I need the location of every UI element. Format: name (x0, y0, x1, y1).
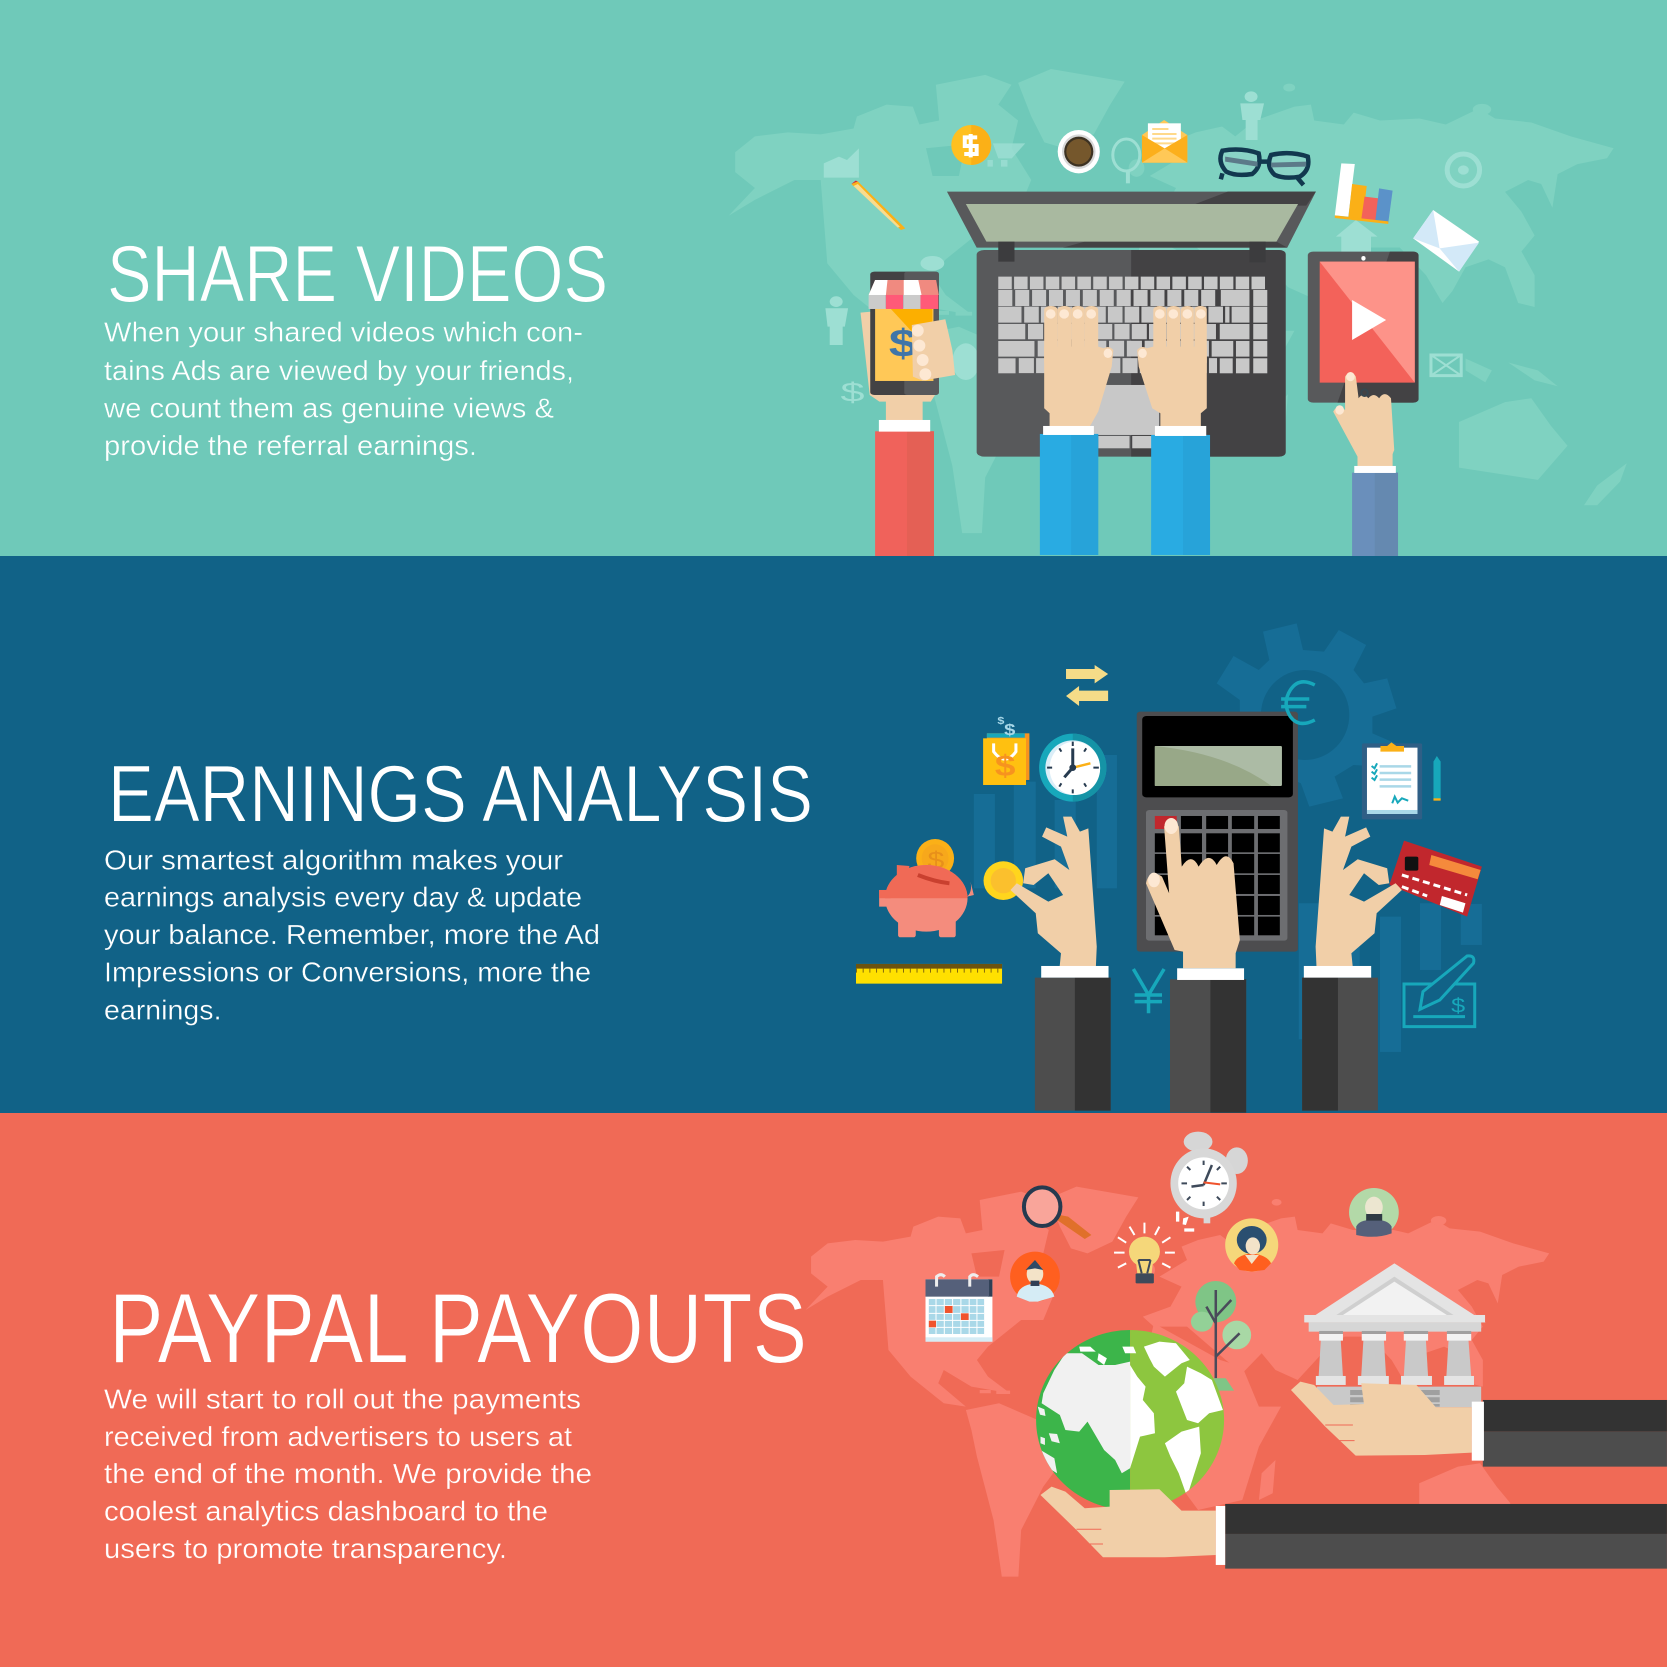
icon: bar chart (1335, 163, 1393, 224)
hand holding bank with sleeve (1291, 1382, 1667, 1467)
heading: share videos: SHARE VIDEOS (107, 230, 608, 320)
text: paypal payouts description: coolest analytics dashboard to the (104, 1496, 548, 1527)
text: earnings analysis description: Our smartest algorithm makes your (104, 844, 563, 875)
icon: bank building (1304, 1263, 1486, 1407)
icon: magnifying glass (1024, 1187, 1091, 1239)
calculator (1137, 712, 1298, 952)
icon: teal pencil (1433, 756, 1441, 801)
icon: shopping bag: $ (995, 751, 1016, 783)
text: earnings analysis description: earnings. (104, 994, 222, 1025)
icon: shopping bag: $ (1004, 721, 1015, 739)
heading: paypal payouts: PAYPAL PAYOUTS (109, 1273, 807, 1384)
panel: share videos (0, 0, 1667, 557)
icon: avatar bearded man green (1349, 1188, 1399, 1237)
icon: piggy bank (879, 839, 974, 937)
left hand with sleeve (1010, 817, 1111, 1111)
text: paypal payouts description: the end of the month. We provide the (104, 1458, 592, 1489)
text: earnings analysis description: your balance. Remember, more the Ad (104, 919, 600, 950)
icon: avatar man orange (1010, 1252, 1060, 1302)
text: earnings analysis description: Impressions or Conversions, more the (104, 957, 591, 988)
text: paypal payouts description: We will start to roll out the payments (104, 1383, 581, 1414)
panel: earnings analysis (0, 556, 1667, 1113)
right typing arm (1137, 306, 1210, 555)
icon: dollar coin (951, 125, 991, 165)
text: share videos description: When your shared videos which con- (104, 317, 583, 348)
icon: calendar (926, 1275, 992, 1342)
faint background icons (824, 91, 1377, 408)
icon: coffee cup (1058, 130, 1100, 173)
icon: earth globe (1036, 1330, 1224, 1510)
icon: gold coin (984, 861, 1023, 900)
pointing hand with blue sleeve (1333, 372, 1398, 557)
text: paypal payouts description: users to promote transparency. (104, 1533, 507, 1564)
keyboard (998, 283, 1267, 366)
world map background (806, 1187, 1560, 1577)
phone in hand with red sleeve (861, 272, 955, 557)
panel: paypal payouts (0, 1113, 1667, 1667)
illustration: laptop, phone and tablet (824, 91, 1480, 557)
icon: wall clock (1039, 734, 1106, 802)
left typing arm (1040, 306, 1113, 555)
icon: euro (1281, 682, 1315, 723)
icon: cheque and pen (1404, 956, 1475, 1027)
tablet with play button (1308, 252, 1419, 403)
faint gear and bars (974, 623, 1482, 1052)
icon: yen (1133, 969, 1164, 1013)
hand holding globe with sleeve (1041, 1487, 1667, 1569)
text: share videos description (103, 317, 583, 461)
text: earnings analysis description (104, 844, 600, 1025)
illustration: globe, bank and hands (926, 1132, 1667, 1569)
icon: cheque and pen: $ (1451, 994, 1466, 1017)
right hand with sleeve (1302, 817, 1402, 1111)
icon: piggy bank: $ (928, 846, 944, 874)
icon: avatar woman yellow (1225, 1218, 1278, 1272)
text: paypal payouts description (104, 1383, 592, 1564)
icon: envelope with letter (1142, 120, 1187, 163)
world map background (729, 69, 1627, 533)
icon: tree (1191, 1281, 1251, 1391)
icon: paper plane envelope (1413, 210, 1479, 272)
text: share videos description: we count them as genuine views & (103, 392, 554, 423)
illustration: calculator and hands (856, 623, 1482, 1113)
icon: light bulb (1114, 1223, 1175, 1283)
text: share videos description: provide the referral earnings. (104, 430, 477, 461)
icon: ruler (856, 964, 1002, 984)
icon: alarm clock (1170, 1132, 1248, 1232)
icon: shopping bag: $ (997, 716, 1005, 727)
icon: arrows (1066, 665, 1108, 706)
icon: clipboard (1362, 742, 1422, 819)
icon: pencil (851, 181, 905, 230)
text: share videos description: tains Ads are viewed by your friends, (104, 355, 574, 386)
phone in hand with red sleeve: $ (889, 321, 917, 365)
laptop (947, 192, 1316, 457)
text: earnings analysis description: earnings analysis every day & update (104, 882, 582, 913)
center hand with sleeve (1146, 818, 1246, 1113)
credit card (1389, 841, 1482, 917)
faint background icons: $ (841, 378, 865, 408)
icon: shopping bag (983, 716, 1029, 785)
icon: glasses (1220, 149, 1308, 185)
text: paypal payouts description: received from advertisers to users at (104, 1421, 572, 1452)
heading: earnings analysis: EARNINGS ANALYSIS (108, 750, 813, 840)
